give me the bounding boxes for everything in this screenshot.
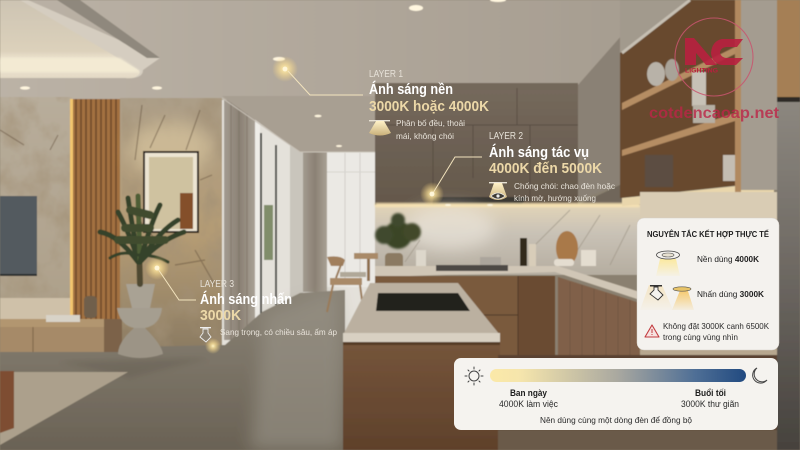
framed picture xyxy=(143,151,199,233)
panel: nguyên tắc kết hợp thực tế: Không đặt 3000K canh 6500K xyxy=(663,322,770,331)
right taupe cabinet xyxy=(578,35,622,200)
layer 2 callout: Chống chói: chao đèn hoặc xyxy=(514,181,616,191)
media console xyxy=(0,296,122,352)
panel: nguyên tắc kết hợp thực tế: Nhấn dùng 3000K xyxy=(697,289,765,299)
callout line 2 xyxy=(420,157,482,206)
panel: daylight to evening scale: Nên dùng cùng một dòng đèn để đồng bộ xyxy=(540,415,692,425)
logo watermark: cotdencaoap.net xyxy=(649,105,779,122)
layer 1 callout xyxy=(272,56,489,141)
plant xyxy=(100,196,184,284)
layer 1 callout: Ánh sáng nền xyxy=(369,81,453,98)
panel: nguyên tắc kết hợp thực tế: Nền dùng 4000K xyxy=(697,254,760,264)
lower floor under panel xyxy=(498,355,777,450)
callout line 1 xyxy=(272,56,363,95)
rug xyxy=(0,372,128,445)
icon: track spot and warm downlight xyxy=(640,285,694,310)
layer 2 callout: 4000K đến 5000K xyxy=(489,161,602,177)
ceiling lower edge xyxy=(222,96,377,152)
panel: daylight to evening scale: 3000K thư giãn xyxy=(681,399,739,409)
upper cabinet xyxy=(375,85,578,207)
panel: nguyên tắc kết hợp thực tế xyxy=(637,218,779,350)
dining chairs xyxy=(327,253,378,312)
downlights xyxy=(20,0,506,206)
right column and wood panel xyxy=(640,0,800,450)
panel: daylight to evening scale: Ban ngày xyxy=(510,388,548,398)
floor xyxy=(0,290,345,450)
logo watermark xyxy=(649,18,779,122)
ceiling xyxy=(0,0,800,160)
right stone wall xyxy=(120,98,222,348)
curtains and windows xyxy=(222,100,377,345)
range hood xyxy=(432,197,528,206)
layer 1 callout: LAYER 1 xyxy=(369,69,403,80)
stone texture xyxy=(0,97,222,348)
layer 1 callout: Phân bố đều, thoải xyxy=(396,118,465,128)
island xyxy=(343,283,500,450)
wood slat wall xyxy=(70,99,122,319)
layer 2 callout xyxy=(420,131,616,206)
panel: nguyên tắc kết hợp thực tế: NGUYÊN TẮC KẾT HỢP THỰC TẾ xyxy=(647,228,769,239)
layer 2 callout: kính mờ, hướng xuống xyxy=(514,193,596,203)
icon: spot light xyxy=(200,327,221,354)
sofa xyxy=(0,371,14,433)
layer 3 callout: 3000K xyxy=(200,308,242,324)
pedestal planter xyxy=(117,284,163,358)
icon: ceiling light 1 xyxy=(369,120,391,136)
panel: daylight to evening scale: 4000K làm việc xyxy=(499,399,559,409)
layer 1 callout: mái, không chói xyxy=(396,131,454,141)
under cabinet light strip xyxy=(375,203,640,207)
layer 3 callout: Ánh sáng nhấn xyxy=(200,291,292,308)
panel: nguyên tắc kết hợp thực tế: trong cùng vùng nhìn xyxy=(663,333,738,342)
icon: sun xyxy=(465,367,483,385)
logo watermark: LIGHTING xyxy=(685,68,718,74)
marble backsplash xyxy=(375,205,640,275)
tv xyxy=(0,196,37,276)
callout line 3 xyxy=(145,256,196,300)
right marble area behind panel xyxy=(640,222,777,358)
coffered ceiling light xyxy=(0,0,160,78)
layer 2 callout: Ánh sáng tác vụ xyxy=(489,144,589,161)
lit stone shelf strip xyxy=(0,298,70,320)
icon: downlight xyxy=(656,251,680,276)
layer 2 callout: LAYER 2 xyxy=(489,131,523,142)
wood shelves xyxy=(620,0,774,206)
layer 3 callout xyxy=(145,256,337,354)
icon: light with eye xyxy=(489,182,507,200)
gradient bar xyxy=(490,369,746,382)
layer 1 callout: 3000K hoặc 4000K xyxy=(369,99,489,115)
panel: daylight to evening scale: Buổi tối xyxy=(695,388,726,398)
panel: daylight to evening scale xyxy=(454,358,778,430)
left stone wall xyxy=(0,97,72,302)
icon: moon xyxy=(753,368,767,383)
icon: warning triangle xyxy=(645,325,659,337)
layer 3 callout: LAYER 3 xyxy=(200,279,234,290)
lower wood cabinets xyxy=(375,276,640,358)
back countertop xyxy=(375,266,640,300)
kitchen decor: vase plant, pot, bottles, boards xyxy=(375,213,596,287)
layer 3 callout: Sang trọng, có chiều sâu, ấm áp xyxy=(220,327,337,337)
